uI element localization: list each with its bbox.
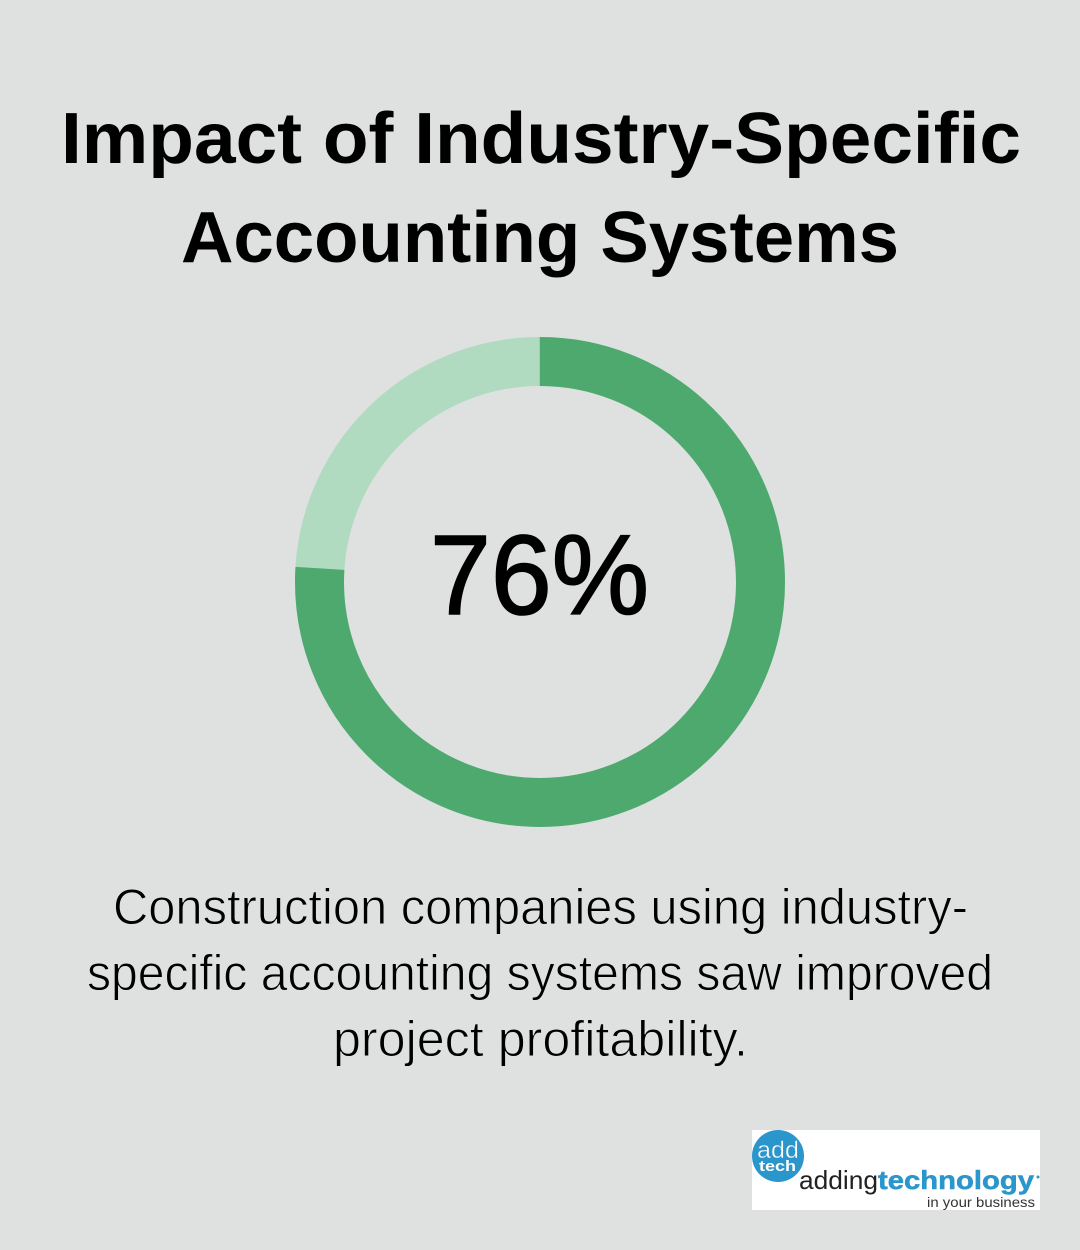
description text: project profitability. xyxy=(333,1011,748,1067)
logo badge: tech xyxy=(759,1158,796,1175)
description text: Construction companies using industry- xyxy=(113,879,968,935)
title xyxy=(61,99,1021,278)
logo wordmark: adding xyxy=(799,1165,878,1195)
description text: specific accounting systems saw improved xyxy=(87,945,993,1001)
logo tagline: in your business xyxy=(927,1194,1035,1210)
logo badge: add xyxy=(757,1137,799,1164)
title: Accounting Systems xyxy=(181,198,899,278)
logo badge xyxy=(752,1130,804,1182)
logo wordmark xyxy=(799,1165,1040,1195)
donut value: 76% xyxy=(430,512,649,638)
logo wordmark: technology xyxy=(878,1165,1035,1195)
description text xyxy=(87,879,993,1067)
donut chart: 76% xyxy=(320,362,760,802)
title: Impact of Industry-Specific xyxy=(61,99,1021,179)
logo: adding technology xyxy=(752,1130,1040,1210)
